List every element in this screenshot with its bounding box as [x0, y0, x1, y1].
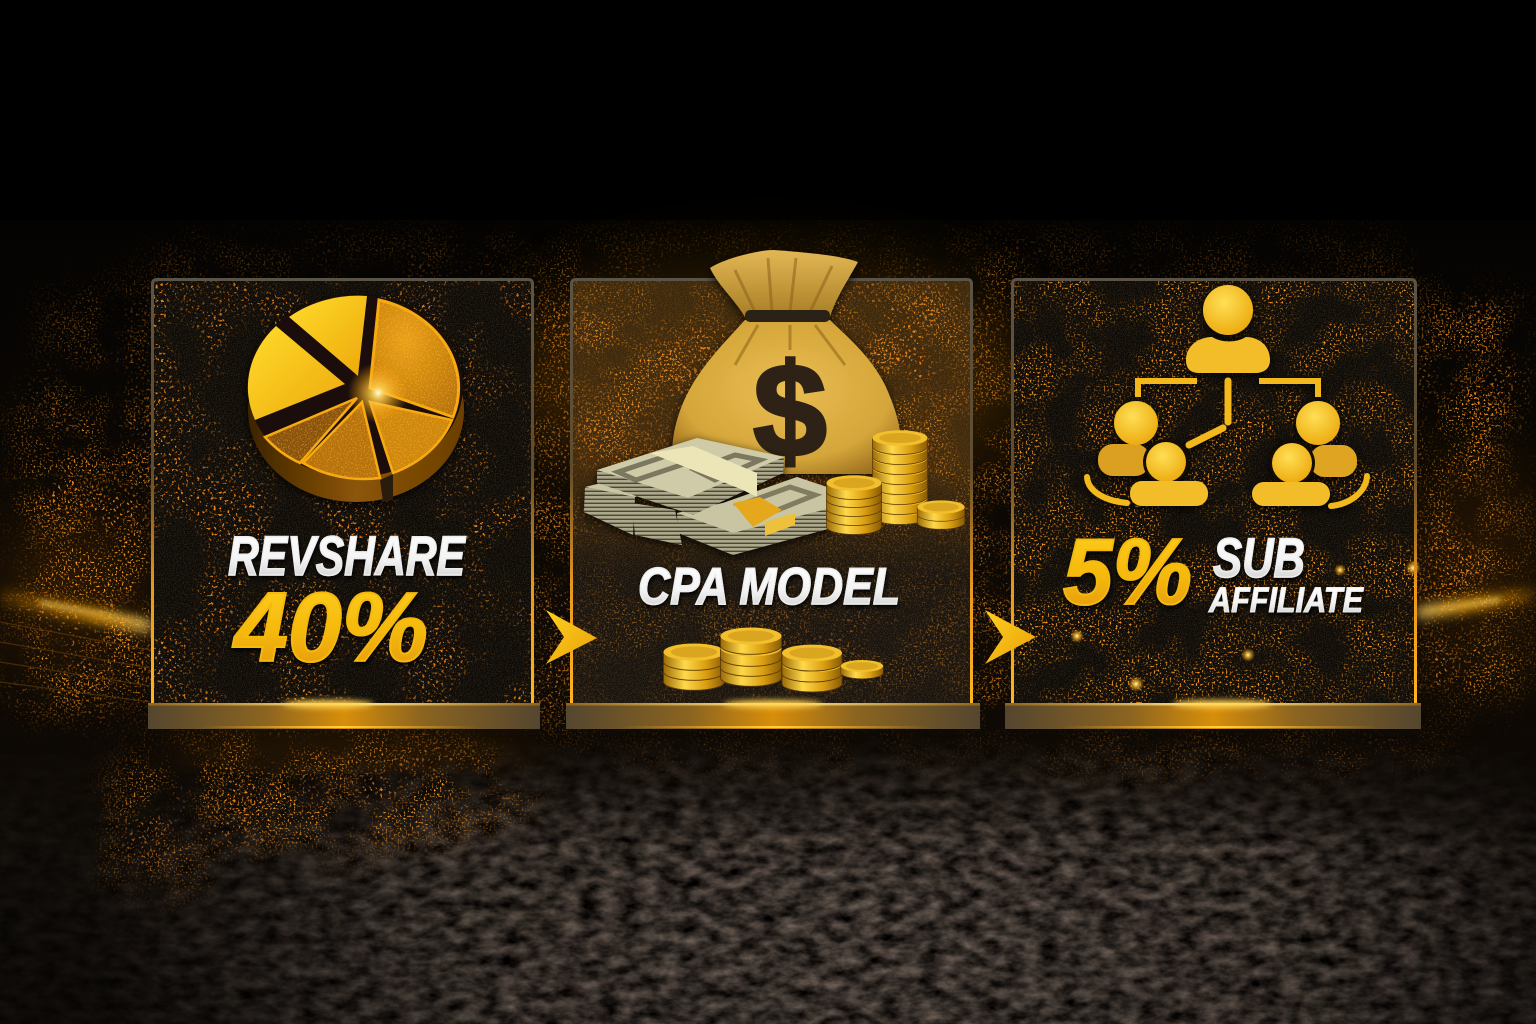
panel 3 grain — [1013, 280, 1415, 704]
icon: referral network — [1087, 285, 1367, 506]
panel 2 frame — [572, 280, 972, 704]
left light streak — [0, 590, 178, 702]
panel 1 glass — [151, 278, 534, 708]
panel 2 warm glow — [572, 280, 971, 580]
panel: revshare — [148, 278, 540, 729]
panel 3 glass — [1011, 278, 1417, 708]
heading: cpa model: CPA MODEL — [638, 558, 900, 616]
background: warm ambient glow — [0, 270, 1530, 762]
panel 2 particles — [572, 280, 971, 704]
icon: coin stack small right — [917, 500, 965, 529]
icon: money bag — [672, 250, 901, 484]
panel: sub affiliate — [1005, 278, 1421, 729]
icon: coin stack middle — [826, 475, 882, 534]
panel 2 grain — [572, 280, 971, 704]
background: gold particle dust — [0, 220, 1536, 918]
icon: lower coin stacks — [664, 627, 883, 692]
base plate 3 — [1005, 700, 1421, 729]
arrow 1 — [546, 610, 597, 664]
base plate 1 — [148, 700, 540, 729]
value: 40%: 40% — [232, 572, 428, 682]
panel 3 glowing sparks — [1070, 560, 1421, 692]
right light streak — [1405, 588, 1536, 618]
heading: revshare: REVSHARE — [228, 524, 466, 587]
background: rough ground texture — [0, 735, 1536, 1024]
icon: coin stack right — [872, 430, 928, 524]
panel 1 grain — [153, 280, 532, 704]
value: 5%: 5% — [1063, 519, 1192, 624]
arrow 2 — [985, 610, 1036, 664]
panel 1 frame — [152, 280, 532, 704]
panel 2 glass — [570, 278, 973, 708]
panel: cpa model — [566, 250, 980, 729]
icon: cash bundles — [584, 438, 835, 555]
panel 3 particles — [1013, 280, 1415, 704]
icon: money bag: $ — [753, 337, 827, 484]
panel 3 frame — [1012, 280, 1416, 704]
heading: sub: SUB — [1213, 526, 1305, 589]
base plate 2 — [566, 700, 980, 729]
panel 1 particles — [153, 280, 532, 704]
heading: affiliate: AFFILIATE — [1208, 581, 1364, 620]
background: dark speckled band — [0, 220, 1536, 1024]
icon: pie chart — [247, 295, 464, 502]
